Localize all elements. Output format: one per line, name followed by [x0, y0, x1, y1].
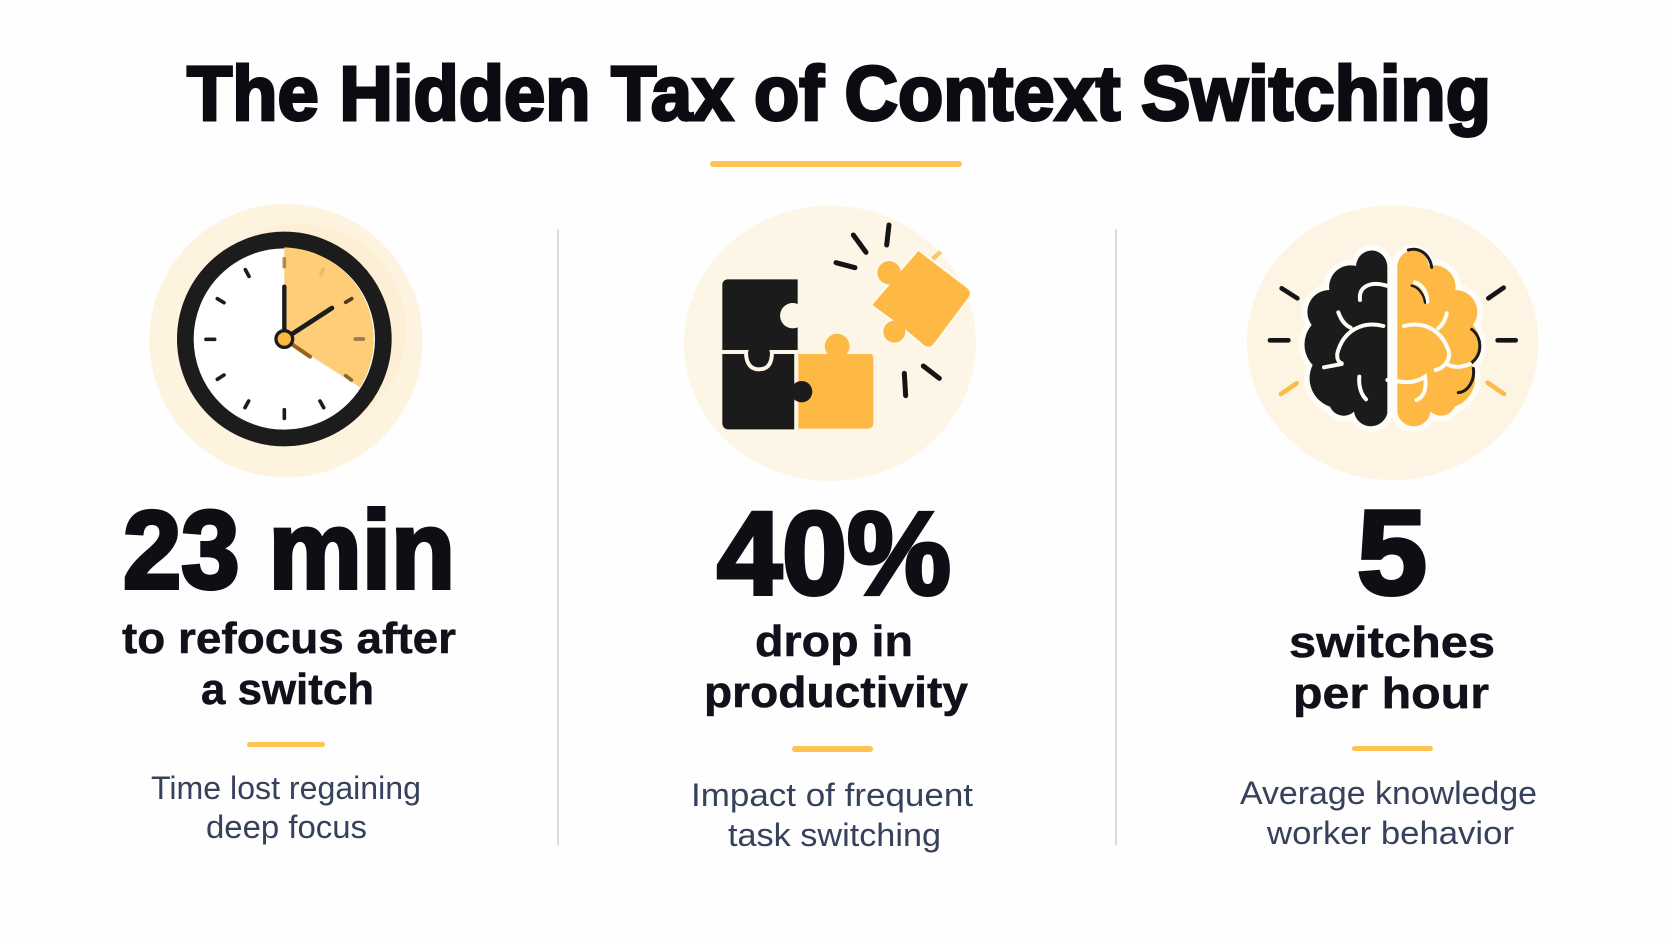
description	[1240, 775, 1537, 851]
brain right shadow	[1408, 249, 1480, 393]
description: task switching	[728, 817, 941, 853]
icon: floating puzzle piece	[872, 251, 970, 347]
subtitle: productivity	[704, 668, 969, 717]
subtitle: per hour	[1293, 669, 1489, 718]
brain left hemisphere	[1305, 250, 1387, 426]
subtitle	[704, 617, 969, 717]
panel: refocus time	[122, 204, 456, 845]
stat: 40%: 40%	[717, 488, 951, 620]
subtitle: a switch	[201, 665, 374, 714]
description: worker behavior	[1266, 815, 1514, 851]
icon: clock	[149, 204, 423, 477]
icon: brain	[1247, 205, 1538, 480]
description: deep focus	[206, 809, 367, 845]
stat: 23 min: 23 min	[123, 489, 455, 612]
title: The Hidden Tax of Context Switching	[187, 51, 1491, 137]
accent rule	[247, 742, 325, 747]
description: Time lost regaining	[151, 770, 421, 806]
accent rule	[792, 746, 873, 752]
subtitle: to refocus after	[122, 614, 456, 663]
panel: switches per hour	[1240, 205, 1538, 851]
title underline	[710, 161, 962, 167]
subtitle: switches	[1289, 618, 1495, 667]
icon: radiating lines	[1270, 288, 1516, 394]
subtitle	[1289, 618, 1495, 718]
accent rule	[1352, 746, 1433, 751]
icon: burst lines	[836, 225, 939, 396]
icon: puzzle pieces	[684, 206, 976, 481]
subtitle	[122, 614, 456, 714]
description	[151, 770, 421, 845]
panel: productivity drop	[684, 206, 976, 853]
description	[691, 777, 973, 853]
subtitle: drop in	[755, 617, 913, 666]
stat: 5: 5	[1357, 486, 1427, 620]
brain right hemisphere	[1397, 250, 1480, 426]
description: Average knowledge	[1240, 775, 1537, 811]
description: Impact of frequent	[691, 777, 973, 813]
